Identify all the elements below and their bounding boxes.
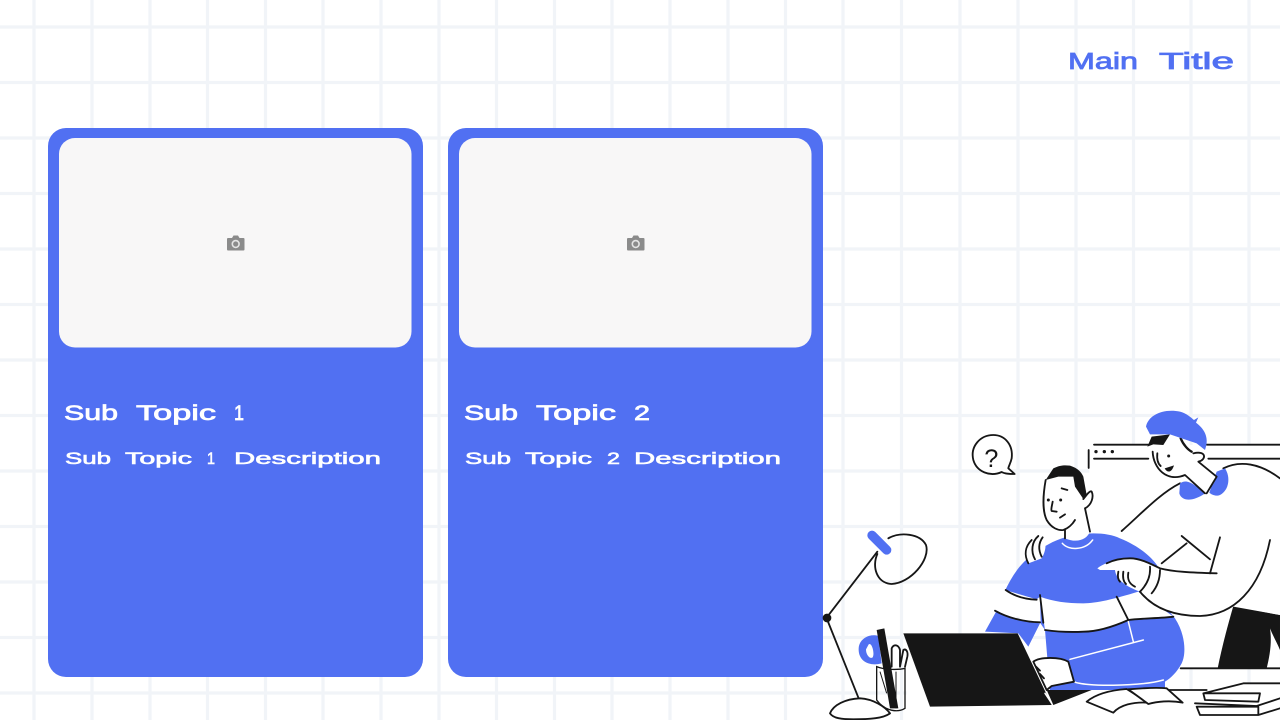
stacked books	[1195, 683, 1280, 715]
standing person	[1122, 411, 1280, 668]
title: Main	[1068, 48, 1138, 74]
image placeholder 2	[459, 138, 812, 348]
arm stripe	[995, 590, 1041, 623]
open book	[1087, 688, 1183, 713]
illustration: two people at a laptop	[823, 411, 1280, 720]
tape roll	[859, 635, 882, 664]
heading: sub topic 2: 2	[634, 402, 650, 425]
description: sub topic 1	[65, 449, 381, 468]
table line	[1165, 668, 1280, 690]
description: sub topic 1: Topic	[125, 449, 193, 468]
head	[1153, 437, 1217, 493]
heading: sub topic 1: 1	[234, 402, 244, 425]
lower left arm	[985, 611, 1040, 647]
icon: camera 2	[627, 236, 644, 250]
sweater seams	[995, 590, 1173, 632]
heading: sub topic 1	[64, 402, 244, 425]
desk surfaces	[907, 691, 1280, 720]
icon: camera 1	[227, 236, 244, 250]
torso stripe	[1040, 592, 1173, 632]
description: sub topic 2: Topic	[525, 449, 593, 468]
description: sub topic 2: 2	[607, 449, 620, 468]
seated sweater	[1005, 533, 1184, 690]
description: sub topic 1: Sub	[65, 449, 111, 468]
card background 1	[48, 128, 423, 677]
collar	[1179, 468, 1228, 500]
seated head	[1044, 466, 1093, 541]
panel: sub topic 2	[448, 128, 823, 677]
beret	[1146, 411, 1207, 450]
image placeholder 1	[59, 138, 412, 348]
card background 2	[448, 128, 823, 677]
trouser gap	[1267, 628, 1280, 668]
description: sub topic 2	[465, 449, 781, 468]
trousers	[1218, 606, 1280, 668]
heading: sub topic 2: Topic	[536, 402, 616, 425]
seated hair	[1046, 465, 1087, 499]
laptop	[903, 633, 1092, 707]
pen holder	[877, 628, 908, 711]
description: sub topic 1: Description	[234, 449, 381, 468]
browser window backdrop	[1089, 445, 1280, 668]
seated person	[985, 465, 1184, 690]
title: Title	[1159, 48, 1234, 74]
question mark: ?	[984, 445, 998, 473]
panel: sub topic 1	[48, 128, 423, 677]
description: sub topic 1: 1	[207, 449, 215, 468]
face	[1167, 454, 1170, 457]
hand on shoulder	[1026, 535, 1046, 563]
seated face	[1047, 498, 1050, 501]
title	[1068, 48, 1234, 74]
desk lamp	[823, 534, 927, 719]
heading: sub topic 1: Sub	[64, 402, 118, 425]
description: sub topic 2: Sub	[465, 449, 511, 468]
hair	[1147, 434, 1170, 447]
heading: sub topic 2: Sub	[464, 402, 518, 425]
heading: sub topic 2	[464, 402, 650, 425]
pointing arm	[1097, 536, 1270, 616]
heading: sub topic 1: Topic	[136, 402, 216, 425]
question bubble	[973, 435, 1015, 474]
description: sub topic 2: Description	[634, 449, 781, 468]
sweater	[1122, 464, 1280, 616]
